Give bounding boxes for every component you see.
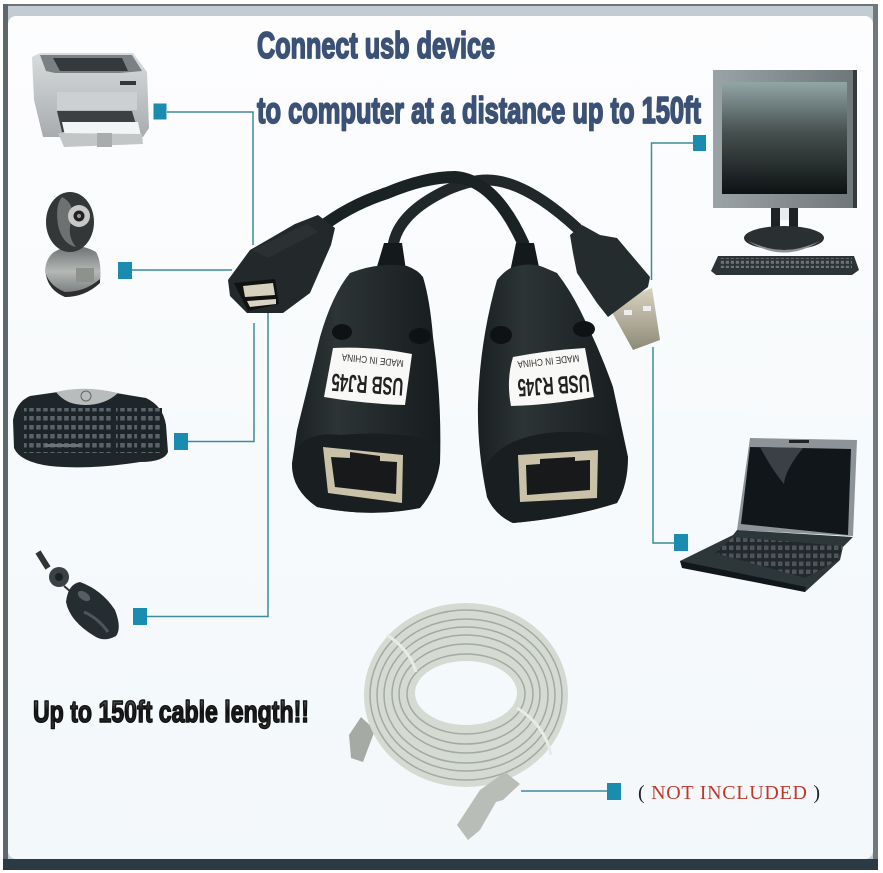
label: USB RJ45 right: MADE IN CHINA — [517, 352, 580, 369]
icon: keyboard — [13, 389, 168, 467]
label: USB RJ45 right — [509, 348, 594, 406]
line: monitor — [652, 135, 706, 280]
USB female connector — [228, 215, 335, 313]
icon: printer — [32, 53, 149, 147]
line: network cable — [521, 783, 621, 800]
label: USB RJ45 right: USB RJ45 — [517, 369, 590, 401]
cable to USB plug — [393, 180, 578, 246]
connector lines and markers — [118, 104, 706, 800]
label: USB RJ45 left — [324, 348, 412, 405]
line: laptop — [653, 347, 688, 551]
product: RJ45 USB extenders — [228, 177, 660, 523]
line: printer — [154, 104, 253, 245]
bottom plug — [457, 772, 520, 840]
label: USB RJ45 left: MADE IN CHINA — [341, 351, 404, 368]
icon: monitor — [711, 70, 859, 275]
left plug — [349, 717, 375, 762]
port: RJ45 left — [323, 447, 403, 503]
cable to right unit — [320, 177, 524, 245]
note: not included: ( NOT INCLUDED ) — [638, 782, 820, 804]
right extender unit — [478, 243, 628, 523]
title: Connect usb device — [257, 25, 495, 66]
port: RJ45 right — [518, 450, 598, 502]
line: webcam — [118, 262, 232, 279]
left extender unit — [292, 243, 440, 513]
icon: webcam — [45, 192, 100, 297]
callout: cable length: Up to 150ft cable length!! — [33, 694, 309, 729]
icon: mouse — [38, 552, 119, 639]
title — [257, 25, 701, 131]
line: keyboard — [174, 323, 254, 450]
icon: laptop — [680, 438, 857, 592]
line: mouse — [133, 312, 268, 625]
label: USB RJ45 left: USB RJ45 — [330, 367, 404, 400]
icon: coiled network cable — [349, 603, 568, 840]
USB male plug — [570, 225, 660, 350]
